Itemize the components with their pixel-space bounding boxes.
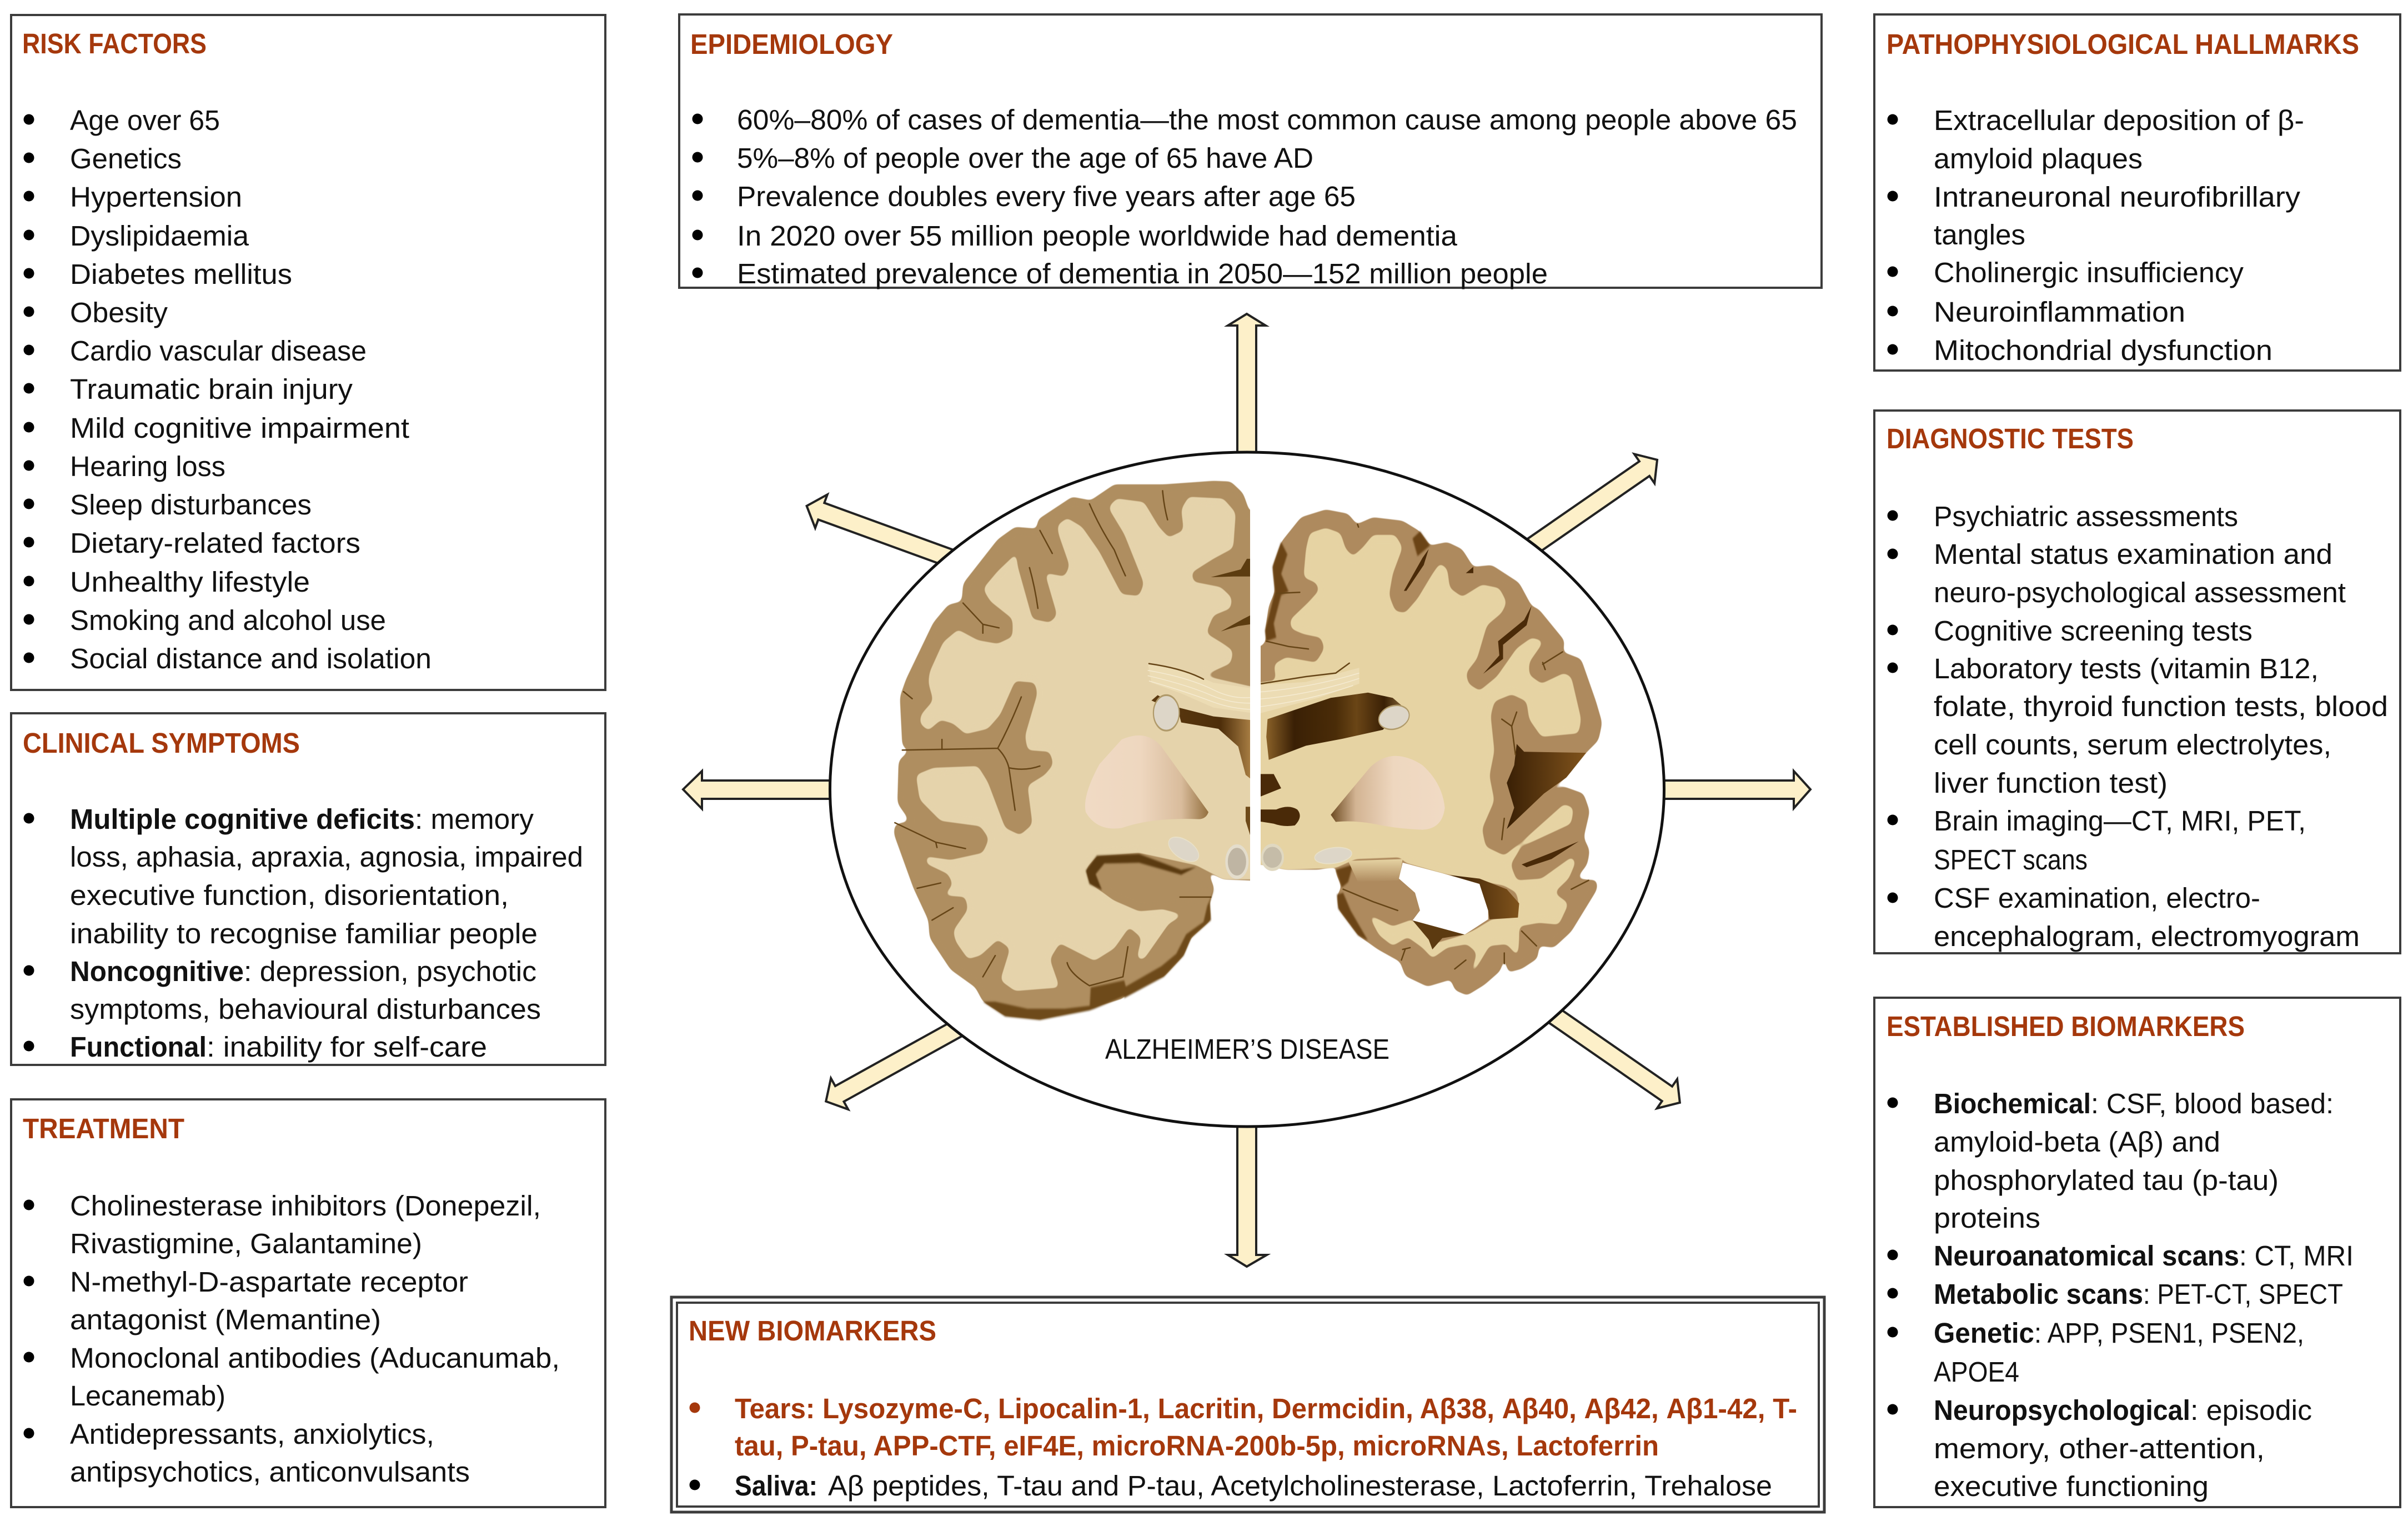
- risk factors list: Hypertension: [70, 181, 242, 213]
- clinical symptoms list: : memory: [415, 803, 534, 835]
- diagnostic tests list: Laboratory tests (vitamin B12,: [1934, 653, 2319, 684]
- risk factors list: Hearing loss: [70, 451, 225, 482]
- hallmarks frame: [1874, 14, 2400, 371]
- panel: diagnostic tests: [1874, 411, 2400, 953]
- treatment list: antagonist (Memantine): [70, 1304, 381, 1335]
- established biomarkers list: Biochemical: [1934, 1088, 2091, 1119]
- clinical symptoms list: symptoms, behavioural disturbances: [70, 993, 541, 1025]
- clinical symptoms list: Noncognitive: [70, 955, 244, 987]
- diagnostic tests heading: DIAGNOSTIC TESTS: [1887, 423, 2134, 454]
- panel: treatment: [11, 1099, 605, 1507]
- hallmarks list: Intraneuronal neurofibrillary: [1934, 181, 2301, 213]
- risk factors list: Smoking and alcohol use: [70, 604, 386, 636]
- risk factors list: Dietary-related factors: [70, 527, 360, 559]
- established biomarkers list: : episodic: [2190, 1394, 2312, 1426]
- right small ovals: [1262, 845, 1352, 869]
- new biomarkers list: Tears: Lysozyme-C, Lipocalin-1, Lacritin, Dermcidin, Aβ38, Aβ40, Aβ42, Aβ1-42, T-: [735, 1393, 1797, 1424]
- right sulci: [1261, 524, 1588, 969]
- hallmarks list: [1934, 104, 2304, 366]
- right grey matter: [1251, 509, 1602, 995]
- left medial sulcal wedges: [1211, 559, 1250, 632]
- right basal ganglia: [1331, 756, 1445, 830]
- arrow: lower right to established biomarkers: [1535, 995, 1690, 1117]
- arrow: right to diagnostic tests: [1649, 771, 1810, 808]
- clinical symptoms bullets: [23, 813, 34, 1051]
- hallmarks list: amyloid plaques: [1934, 143, 2143, 174]
- established biomarkers list: : CSF, blood based:: [2091, 1088, 2334, 1119]
- treatment list: Antidepressants, anxiolytics,: [70, 1418, 434, 1450]
- risk factors list: Unhealthy lifestyle: [70, 566, 310, 598]
- epidemiology list: [737, 104, 1797, 289]
- diagnostic tests list: SPECT scans: [1934, 844, 2088, 875]
- arrow: down to new biomarkers: [1228, 1111, 1267, 1267]
- treatment list: [70, 1190, 560, 1488]
- epidemiology list: Prevalence doubles every five years after age 65: [737, 181, 1356, 212]
- diagnostic tests list: folate, thyroid function tests, blood: [1934, 691, 2388, 722]
- hallmarks list: Neuroinflammation: [1934, 296, 2185, 328]
- hallmarks list: Mitochondrial dysfunction: [1934, 334, 2272, 366]
- new biomarkers double frame: [671, 1297, 1824, 1512]
- left ventricle: [1151, 695, 1250, 778]
- hallmarks bullets: [1887, 114, 1898, 354]
- panel: clinical symptoms: [11, 713, 605, 1065]
- risk factors list: Genetics: [70, 143, 182, 174]
- right sulcal shadow: [1507, 744, 1586, 829]
- brain: healthy left hemisphere: [894, 481, 1263, 1020]
- epidemiology list: 60%–80% of cases of dementia—the most common cause among people above 65: [737, 104, 1797, 136]
- established biomarkers heading: ESTABLISHED BIOMARKERS: [1887, 1010, 2245, 1042]
- diagnostic tests list: cell counts, serum electrolytes,: [1934, 729, 2331, 760]
- new biomarkers list: tau, P-tau, APP-CTF, eIF4E, microRNA-200b-5p, microRNAs, Lactoferrin: [735, 1430, 1659, 1462]
- diagnostic tests list: neuro-psychological assessment: [1934, 577, 2346, 608]
- established biomarkers list: Genetic: [1934, 1317, 2034, 1349]
- established biomarkers list: : CT, MRI: [2239, 1240, 2354, 1272]
- clinical symptoms list: [70, 803, 583, 1063]
- diagnostic tests list: [1934, 501, 2388, 952]
- treatment frame: [11, 1099, 605, 1507]
- diagnostic tests list: encephalogram, electromyogram: [1934, 920, 2360, 952]
- panel: established biomarkers: [1874, 998, 2400, 1507]
- clinical symptoms list: inability to recognise familiar people: [70, 918, 538, 949]
- left small ovals: [1166, 807, 1250, 877]
- new biomarkers list: Saliva:: [735, 1470, 817, 1502]
- established biomarkers list: Metabolic scans: [1934, 1278, 2143, 1310]
- left white matter: [916, 497, 1263, 991]
- arrow: lower left to treatment: [817, 1008, 974, 1117]
- risk factors list: Age over 65: [70, 104, 220, 136]
- hallmarks list: Cholinergic insufficiency: [1934, 257, 2244, 288]
- risk factors frame: [11, 15, 605, 690]
- left shaded edges: [983, 888, 1215, 1020]
- diagnostic tests list: Mental status examination and: [1934, 538, 2332, 570]
- new biomarkers list: [735, 1393, 1797, 1502]
- risk factors list: Social distance and isolation: [70, 643, 432, 674]
- treatment list: Lecanemab): [70, 1380, 225, 1412]
- right corpus callosum: [1251, 668, 1359, 716]
- clinical symptoms list: : depression, psychotic: [244, 955, 536, 987]
- panel: new biomarkers: [671, 1297, 1824, 1512]
- new biomarkers bullets: [690, 1402, 700, 1490]
- epidemiology list: Estimated prevalence of dementia in 2050—152 million people: [737, 258, 1548, 289]
- left hippocampal fold: [1085, 852, 1195, 911]
- right ventricle oval: [1378, 703, 1411, 732]
- hallmarks heading: PATHOPHYSIOLOGICAL HALLMARKS: [1887, 28, 2359, 60]
- right fade patch: [1348, 859, 1403, 882]
- risk factors list: Sleep disturbances: [70, 489, 312, 521]
- established biomarkers list: phosphorylated tau (p-tau): [1934, 1164, 2279, 1196]
- epidemiology heading: EPIDEMIOLOGY: [690, 28, 893, 60]
- arrow: upper left to risk factors: [801, 489, 963, 577]
- established biomarkers list: Neuropsychological: [1934, 1394, 2190, 1426]
- treatment list: Monoclonal antibodies (Aducanumab,: [70, 1342, 560, 1374]
- clinical symptoms list: : inability for self-care: [207, 1031, 487, 1063]
- established biomarkers list: [1934, 1088, 2354, 1502]
- treatment heading: TREATMENT: [23, 1113, 184, 1144]
- risk factors list: Traumatic brain injury: [70, 373, 353, 405]
- right temporal horn: [1450, 875, 1519, 919]
- risk factors list: Diabetes mellitus: [70, 258, 292, 290]
- hallmarks list: tangles: [1934, 219, 2025, 251]
- established biomarkers list: : PET-CT, SPECT: [2143, 1278, 2343, 1310]
- left corpus callosum: [1147, 663, 1250, 713]
- epidemiology frame: [679, 14, 1822, 288]
- clinical symptoms heading: CLINICAL SYMPTOMS: [23, 727, 300, 759]
- treatment list: antipsychotics, anticonvulsants: [70, 1456, 470, 1488]
- arrow: upper right to hallmarks: [1513, 445, 1667, 567]
- clinical symptoms frame: [11, 713, 605, 1065]
- clinical symptoms list: Functional: [70, 1031, 207, 1063]
- epidemiology list: In 2020 over 55 million people worldwide had dementia: [737, 220, 1458, 252]
- new biomarkers heading: NEW BIOMARKERS: [689, 1315, 936, 1347]
- central circle: [830, 452, 1664, 1127]
- established biomarkers list: Neuroanatomical scans: [1934, 1240, 2239, 1272]
- brain: atrophied right hemisphere: [1251, 509, 1602, 995]
- left grey matter: [894, 481, 1263, 1019]
- arrow: up to epidemiology: [1228, 314, 1266, 467]
- diagnostic tests list: Cognitive screening tests: [1934, 615, 2253, 647]
- right ventricle: [1266, 693, 1405, 760]
- clinical symptoms list: loss, aphasia, apraxia, agnosia, impaired: [70, 841, 583, 873]
- right white matter: [1251, 528, 1581, 976]
- treatment list: Rivastigmine, Galantamine): [70, 1228, 422, 1259]
- clinical symptoms list: Multiple cognitive deficits: [70, 803, 415, 835]
- epidemiology bullets: [692, 113, 703, 278]
- diagnostic tests bullets: [1887, 510, 1898, 903]
- diagnostic tests frame: [1874, 411, 2400, 953]
- left basal ganglia: [1085, 736, 1208, 829]
- diagnostic tests list: Psychiatric assessments: [1934, 501, 2238, 532]
- diagnostic tests list: CSF examination, electro-: [1934, 882, 2260, 914]
- risk factors bullets: [23, 114, 34, 663]
- epidemiology list: 5%–8% of people over the age of 65 have AD: [737, 142, 1313, 174]
- right edge shadows: [1265, 532, 1430, 940]
- established biomarkers list: amyloid-beta (Aβ) and: [1934, 1126, 2220, 1158]
- treatment bullets: [23, 1200, 34, 1439]
- left sulci: [895, 491, 1211, 985]
- new biomarkers list: Aβ peptides, T-tau and P-tau, Acetylcholinesterase, Lactoferrin, Trehalose: [828, 1470, 1772, 1502]
- risk factors list: Dyslipidaemia: [70, 220, 249, 252]
- panel: risk factors: [11, 15, 605, 690]
- panel: epidemiology: [679, 14, 1822, 289]
- treatment list: Cholinesterase inhibitors (Donepezil,: [70, 1190, 541, 1222]
- established biomarkers list: : APP, PSEN1, PSEN2,: [2034, 1317, 2304, 1349]
- risk factors list: Obesity: [70, 297, 168, 328]
- established biomarkers list: proteins: [1934, 1202, 2040, 1234]
- established biomarkers list: APOE4: [1934, 1356, 2019, 1388]
- center label: ALZHEIMER’S DISEASE: [1105, 1033, 1389, 1065]
- treatment list: N-methyl-D-aspartate receptor: [70, 1266, 468, 1298]
- risk factors list: [70, 104, 432, 674]
- clinical symptoms list: executive function, disorientation,: [70, 879, 509, 911]
- right lower wedge: [1413, 920, 1464, 949]
- established biomarkers bullets: [1887, 1098, 1898, 1414]
- established biomarkers list: executive functioning: [1934, 1470, 2209, 1502]
- established biomarkers list: memory, other-attention,: [1934, 1433, 2265, 1464]
- arrow: left to clinical symptoms: [683, 771, 844, 809]
- hallmarks list: Extracellular deposition of β-: [1934, 104, 2304, 136]
- risk factors list: Mild cognitive impairment: [70, 412, 409, 444]
- left ventricle oval: [1153, 695, 1179, 731]
- risk factors list: Cardio vascular disease: [70, 335, 367, 367]
- established biomarkers frame: [1874, 998, 2400, 1507]
- right temporal cavity: [1399, 863, 1488, 934]
- diagnostic tests list: liver function test): [1934, 767, 2168, 799]
- right third ventricle: [1251, 774, 1300, 826]
- diagnostic tests list: Brain imaging—CT, MRI, PET,: [1934, 805, 2306, 837]
- panel: pathophysiological hallmarks: [1874, 14, 2400, 371]
- risk factors heading: RISK FACTORS: [22, 28, 207, 59]
